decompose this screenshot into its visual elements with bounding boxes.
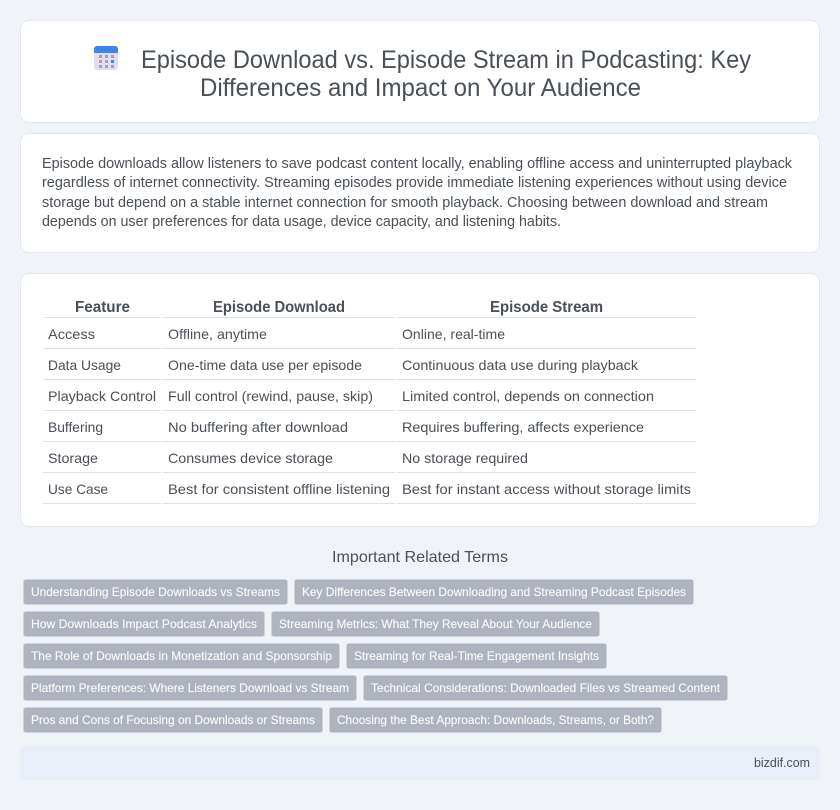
title: Episode Download vs. Episode Stream in Podcasting: Key — [141, 46, 751, 74]
chip: Platform Preferences: Where Listeners Download vs Stream — [31, 681, 349, 695]
table header: Feature — [75, 299, 130, 316]
row: playback control: Limited control, depends on connection — [402, 388, 654, 404]
chip — [272, 612, 600, 636]
chip: Key Differences Between Downloading and Streaming Podcast Episodes — [302, 585, 686, 599]
row: playback control — [48, 388, 654, 404]
chip — [24, 612, 264, 636]
panel: header — [20, 20, 820, 122]
chip — [364, 676, 728, 700]
row: buffering — [48, 419, 644, 435]
row: access: Online, real-time — [402, 326, 505, 342]
table header: Episode Download — [213, 299, 345, 316]
chip: Streaming Metrics: What They Reveal About Your Audience — [279, 617, 592, 631]
row: use case: Best for consistent offline listening — [168, 481, 390, 497]
chip — [24, 708, 322, 732]
chip — [330, 708, 662, 732]
row: buffering: No buffering after download — [168, 419, 348, 435]
chip: Pros and Cons of Focusing on Downloads or Streams — [31, 713, 315, 727]
table header — [75, 299, 603, 316]
row: storage: Storage — [48, 450, 98, 466]
text block: summary paragraph: Episode downloads allow listeners to save podcast content locally, enabling offline access and uninterrupted playback — [42, 156, 793, 172]
row: storage: Consumes device storage — [168, 450, 333, 466]
row: playback control: Full control (rewind, pause, skip) — [168, 388, 373, 404]
row: data usage — [48, 357, 639, 373]
footer: bizdif.com — [754, 756, 810, 770]
title: Differences and Impact on Your Audience — [200, 74, 641, 102]
row: buffering: Buffering — [48, 419, 103, 435]
panel: related term chips — [24, 580, 728, 732]
title — [141, 46, 751, 102]
row: buffering: Requires buffering, affects experience — [402, 419, 644, 435]
chip — [346, 644, 606, 668]
chip: How Downloads Impact Podcast Analytics — [31, 617, 257, 631]
chip: The Role of Downloads in Monetization and Sponsorship — [31, 649, 332, 663]
chip: Understanding Episode Downloads vs Streams — [31, 585, 280, 599]
row: use case: Use Case — [48, 481, 108, 497]
panel: summary — [20, 134, 820, 252]
row: storage: No storage required — [402, 450, 528, 466]
row: data usage: One-time data use per episode — [168, 357, 362, 373]
icon: calendar — [94, 46, 118, 70]
chip — [24, 580, 288, 604]
chip — [24, 644, 340, 668]
text block: summary paragraph: regardless of internet connectivity. Streaming episodes provide immediate listening experiences without using device — [42, 175, 787, 191]
row: data usage: Continuous data use during playback — [402, 357, 639, 373]
row: access: Offline, anytime — [168, 326, 267, 342]
chip: Streaming for Real-Time Engagement Insights — [354, 649, 599, 663]
row: storage — [48, 450, 528, 466]
row: use case — [48, 481, 691, 497]
text block: summary paragraph — [42, 156, 793, 230]
footer — [20, 746, 820, 780]
row: data usage: Data Usage — [48, 357, 121, 373]
panel: comparison table — [20, 274, 820, 526]
row: access — [48, 326, 505, 342]
chip: Technical Considerations: Downloaded Files vs Streamed Content — [371, 681, 721, 695]
heading: related terms: Important Related Terms — [332, 549, 508, 566]
row: use case: Best for instant access without storage limits — [402, 481, 691, 497]
row: access: Access — [48, 326, 95, 342]
text block: summary paragraph: storage but depend on a stable internet connection for smooth playback. Choosing between download and stream — [42, 195, 768, 211]
chip: Choosing the Best Approach: Downloads, Streams, or Both? — [337, 713, 654, 727]
row: playback control: Playback Control — [48, 388, 156, 404]
chip — [294, 580, 694, 604]
chip — [24, 676, 356, 700]
text block: summary paragraph: depends on user preferences for data usage, device capacity, and listening habits. — [42, 214, 561, 230]
table header: Episode Stream — [490, 299, 603, 316]
